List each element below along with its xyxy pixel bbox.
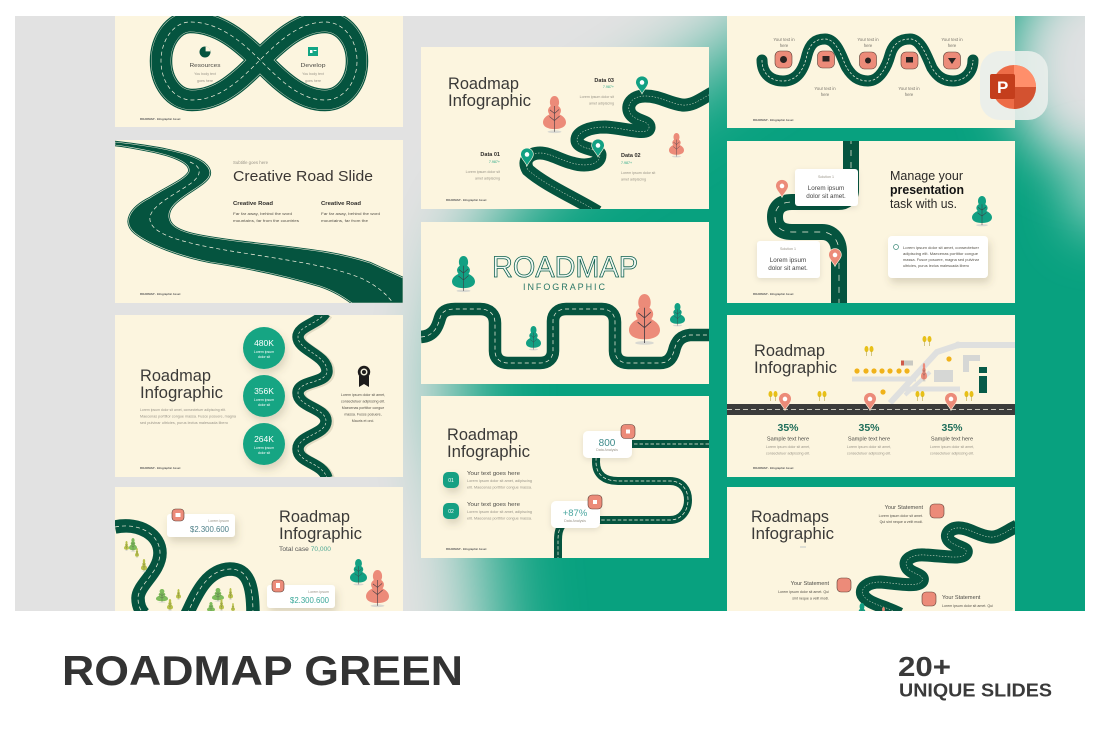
title: [449, 77, 530, 110]
solution card two: [757, 241, 820, 278]
solution card two: Solution 1: [780, 247, 796, 251]
title: [751, 507, 834, 547]
text: data 01: 7.987+: [489, 160, 500, 164]
solution card two: dolor sit amet.: [768, 265, 808, 272]
labels above road: [773, 37, 963, 48]
money card two: $2.300.600: [290, 596, 330, 605]
labels above road: Your text in: [857, 37, 879, 42]
title: Infographic: [447, 442, 530, 461]
text: develop: Develop: [300, 63, 326, 69]
stat column one: consectetuer adipiscing elit.: [766, 452, 810, 456]
tree: teal: [350, 559, 367, 585]
yellow dots: [854, 356, 952, 395]
analysis card +87%: [551, 501, 600, 528]
stat circle 356K: dolor sit: [258, 403, 270, 407]
labels below road: here: [821, 92, 830, 97]
tree: salmon large: [629, 294, 660, 345]
tree: teal small middle: [526, 326, 541, 350]
stat column three: [930, 422, 974, 456]
pin: two: [829, 249, 841, 266]
icon: salmon square two: [272, 580, 284, 592]
title: [447, 425, 530, 461]
text: column one: Far far away, behind the word: [233, 212, 292, 216]
text: data 03: Lorem ipsum dolor sit: [580, 95, 614, 99]
text 01: elit. Maecenas porttitor congue massa.: [467, 486, 532, 490]
footer: ROADMAP - Infographic Asset: [140, 117, 180, 121]
icon: board: [308, 47, 318, 56]
info card: massa. Fusce posuere, magna sed pulvinar: [903, 258, 980, 262]
panel: map road with data pins: [421, 47, 712, 212]
pin: data 01: [521, 148, 533, 166]
body text: Lorem ipsum dolor sit amet, consectetuer adipiscing elit.: [140, 408, 226, 412]
stat column three: consectetuer adipiscing elit.: [930, 452, 974, 456]
statement one: [879, 505, 923, 524]
title: Roadmap: [448, 74, 519, 93]
outlined title: ROADMAP: [492, 251, 638, 284]
title: Infographic: [751, 524, 834, 543]
icon: statement three: [922, 592, 936, 606]
text: data 01: amet adipiscing: [475, 176, 500, 180]
labels below road: here: [905, 92, 914, 97]
text: data 01: [466, 152, 500, 180]
footer: ROADMAP - Infographic Asset: [140, 466, 180, 470]
analysis card +87%: +87%: [563, 508, 588, 519]
statement two: [778, 581, 829, 600]
text: develop: goes here: [305, 79, 321, 83]
pin: one: [776, 180, 788, 197]
stat column three: 35%: [941, 422, 963, 434]
labels above road: Your text in: [773, 37, 795, 42]
statement three: Lorem ipsum dolor sit amet. Qui: [942, 604, 993, 608]
money card one: Lorem ipsum: [208, 519, 229, 523]
icon: salmon square +87%: [588, 495, 602, 509]
side text: Mauris et orci.: [352, 419, 374, 423]
text: data 02: Lorem ipsum dolor sit: [621, 171, 655, 175]
panel: road with money cards: [115, 487, 403, 614]
panel: s-curve road with analysis cards: [421, 396, 709, 560]
labels above road: here: [780, 43, 789, 48]
stat circle 264K: dolor sit: [258, 451, 270, 455]
stat column two: Lorem ipsum dolor sit amet,: [847, 445, 891, 449]
road pieces: [115, 526, 253, 614]
road: [862, 526, 1017, 614]
title: Roadmap: [754, 341, 825, 360]
money card one: [167, 514, 235, 537]
side text: consectetuer adipiscing elit.: [341, 400, 385, 404]
body text: sed pulvinar ultricies, purus lectus malesuada libero: [140, 421, 228, 425]
text: column two: Creative Road: [321, 201, 362, 207]
statement three: [942, 595, 993, 608]
title: Roadmaps: [751, 507, 829, 526]
side text: Maecenas porttitor congue: [342, 406, 384, 410]
stat column three: Sample text here: [931, 436, 973, 442]
footer: ROADMAP - Infographic Asset: [753, 118, 793, 122]
badge 02: [443, 503, 459, 519]
text: data 02: [621, 153, 655, 182]
pin: data 02: [592, 139, 604, 157]
title: Infographic: [448, 91, 531, 110]
text: develop: You body text: [302, 72, 324, 76]
text: data 02: 7.987+: [621, 161, 632, 165]
money card two: [267, 585, 335, 608]
text: column one: [233, 201, 299, 223]
icon: salmon square 800: [621, 424, 635, 438]
panel: city map road slide: [727, 315, 1016, 477]
tree: salmon: [366, 570, 389, 607]
stat circle 264K: [243, 423, 285, 465]
stat column two: consectetuer adipiscing elit.: [847, 452, 891, 456]
labels above road: here: [864, 43, 873, 48]
stat circle 480K: Lorem ipsum: [254, 350, 274, 354]
icon: pie chart: [200, 46, 210, 58]
icon: statement one: [930, 504, 944, 518]
side text: Lorem ipsum dolor sit amet,: [341, 393, 385, 397]
badge 01: [443, 472, 459, 488]
small trees: [124, 538, 235, 613]
tree: small salmon: [921, 363, 927, 382]
stat circle 356K: Lorem ipsum: [254, 398, 274, 402]
icon squares: [775, 51, 960, 69]
panel: roadmap title slide: [421, 222, 709, 384]
text: resources: goes here: [197, 79, 213, 83]
badge 02: 02: [448, 509, 454, 515]
text 02: elit. Maecenas porttitor congue massa.: [467, 516, 532, 520]
text: heading: [233, 160, 372, 181]
solution card one: Solution 1: [818, 175, 834, 179]
panel: wavy road with icons: [727, 16, 1015, 128]
text: column one: Creative Road: [233, 201, 274, 207]
tree tops: [856, 603, 887, 624]
stat column two: 35%: [858, 422, 880, 434]
text 01: Your text goes here: [467, 471, 520, 477]
slide count: UNIQUE SLIDES: [899, 680, 1052, 700]
heading: presentation: [890, 182, 964, 197]
road: [727, 404, 1015, 415]
text: develop: [300, 63, 326, 83]
stat circle 356K: 356K: [254, 386, 274, 396]
road: [526, 93, 712, 212]
title: Roadmap: [140, 366, 211, 385]
statement one: Qui sint neque a velit modi.: [880, 520, 923, 524]
statement one: Your Statement: [885, 505, 923, 511]
money card two: Lorem ipsum: [308, 590, 329, 594]
tree: salmon large: [543, 96, 566, 133]
total case: Total case 70,000: [279, 546, 331, 553]
icon: PowerPoint logo: [980, 51, 1048, 120]
panel: statements road slide: [727, 487, 1017, 624]
infinity road: [161, 22, 357, 100]
analysis card 800: 800: [599, 438, 616, 449]
title: [280, 510, 362, 542]
footer: ROADMAP - Infographic Asset: [753, 292, 793, 296]
stat circle 264K: 264K: [254, 434, 274, 444]
footer: ROADMAP - Infographic Asset: [753, 466, 793, 470]
stat column one: Sample text here: [767, 436, 809, 442]
stat column two: Sample text here: [848, 436, 890, 442]
side text: massa. Fusce posuere,: [344, 412, 382, 416]
title: Roadmap: [279, 507, 350, 526]
wide road: [115, 142, 403, 303]
body text: Maecenas porttitor congue massa. Fusce posuere, magna: [140, 414, 236, 418]
main title: ROADMAP GREEN: [62, 647, 463, 694]
stat column three: Lorem ipsum dolor sit amet,: [930, 445, 974, 449]
subtitle: INFOGRAPHIC: [523, 282, 606, 292]
stat circle 480K: dolor sit: [258, 355, 270, 359]
stat column one: 35%: [777, 422, 799, 434]
solution card one: [795, 169, 858, 206]
solution card two: Lorem ipsum: [770, 257, 806, 264]
footer: ROADMAP - Infographic Asset: [446, 547, 486, 551]
text: column two: mountains, far from the: [321, 219, 368, 223]
text: resources: You body text: [194, 72, 216, 76]
icon: PowerPoint logo: P: [997, 78, 1008, 97]
labels below road: Your text in: [814, 86, 836, 91]
title: [754, 341, 837, 377]
analysis card +87%: Data Analysis: [564, 519, 586, 523]
stat circle 356K: [243, 375, 285, 417]
panel: winding road with stat circles: [115, 313, 403, 479]
solution card one: Lorem ipsum: [808, 185, 844, 192]
text: data 03: 7.987+: [603, 85, 614, 89]
text 02: [467, 502, 532, 520]
tree: teal: [972, 196, 992, 226]
stat column two: [847, 422, 891, 456]
title: Roadmap: [447, 425, 518, 444]
winding road: [298, 313, 329, 479]
text: column two: Far far away, behind the word: [321, 212, 380, 216]
statement two: sint neque a velit modi.: [792, 596, 829, 600]
icon: salmon square one: [172, 509, 184, 521]
panel: infinity road slide: [115, 16, 403, 127]
info card: ultricies, purus lectus malesuada libero: [903, 264, 969, 268]
tree: teal left: [452, 256, 475, 292]
icon: award ribbon: [358, 366, 370, 387]
text: data 03: amet adipiscing: [589, 102, 614, 106]
background: grey to green gradient panel: [15, 16, 1085, 611]
info card: [888, 236, 988, 278]
text: data 03: Data 03: [594, 78, 614, 84]
heading: Manage your: [890, 168, 964, 183]
panel: creative road slide: [115, 140, 403, 303]
stat column one: [766, 422, 810, 456]
side text: [341, 393, 385, 423]
money card one: $2.300.600: [190, 525, 230, 534]
panel: solutions road slide: [727, 138, 1015, 305]
text: data 02: amet adipiscing: [621, 178, 646, 182]
text: data 01: Data 01: [480, 152, 500, 158]
text 01: Lorem ipsum dolor sit amet, adipiscing: [467, 479, 532, 483]
labels below road: Your text in: [898, 86, 920, 91]
solution card one: dolor sit amet.: [806, 193, 846, 200]
text: resources: [190, 63, 221, 83]
text: resources: Resources: [190, 63, 221, 69]
heading: task with us.: [890, 196, 957, 211]
statement two: Your Statement: [791, 581, 829, 587]
pins: [779, 393, 957, 410]
text: data 02: Data 02: [621, 153, 641, 159]
pin: data 03: [636, 76, 648, 94]
badge 01: 01: [448, 478, 454, 484]
title: Infographic: [279, 524, 362, 543]
tree: teal right: [670, 303, 685, 326]
stat circle 480K: 480K: [254, 338, 274, 348]
info card: adipiscing elit. Maecenas porttitor congue: [903, 252, 978, 256]
body text: [140, 408, 236, 425]
text: column two: [321, 201, 380, 223]
text 01: [467, 471, 532, 490]
analysis card 800: Data Analysis: [596, 448, 618, 452]
stat circle 264K: Lorem ipsum: [254, 446, 274, 450]
analysis card 800: [583, 431, 632, 458]
slide count: [898, 651, 1052, 700]
labels above road: Your text in: [941, 37, 963, 42]
footer: ROADMAP - Infographic Asset: [446, 198, 486, 202]
text: data 01: Lorem ipsum dolor sit: [466, 170, 500, 174]
icon: statement two: [837, 578, 851, 592]
statement one: Lorem ipsum dolor sit amet.: [879, 514, 923, 518]
labels above road: here: [948, 43, 957, 48]
info card: Lorem ipsum dolor sit amet, consectetuer: [903, 246, 980, 250]
heading: [890, 168, 964, 211]
stat circle 480K: [243, 327, 285, 369]
title: Infographic: [140, 383, 223, 402]
yellow tree pairs: [768, 336, 974, 401]
text 02: Lorem ipsum dolor sit amet, adipiscing: [467, 510, 532, 514]
text: column one: mountains, far from the countries: [233, 219, 299, 223]
road: [775, 138, 851, 305]
wavy road: [762, 39, 973, 81]
text 02: Your text goes here: [467, 502, 520, 508]
statement three: Your Statement: [942, 595, 981, 601]
title: Infographic: [754, 358, 837, 377]
labels below road: [814, 86, 920, 97]
stat column one: Lorem ipsum dolor sit amet,: [766, 445, 810, 449]
statement two: Lorem ipsum dolor sit amet. Qui: [778, 590, 829, 594]
map streets and buildings: [852, 342, 1016, 403]
title: [141, 369, 222, 402]
footer: ROADMAP - Infographic Asset: [140, 292, 180, 296]
text: heading: Creative Road Slide: [233, 168, 373, 185]
slide count: 20+: [898, 651, 951, 682]
road: [421, 309, 709, 363]
road: [558, 444, 709, 560]
text: heading: Subtitle goes here: [233, 160, 269, 165]
text: data 03: [580, 78, 614, 106]
tree: salmon small: [669, 133, 684, 157]
